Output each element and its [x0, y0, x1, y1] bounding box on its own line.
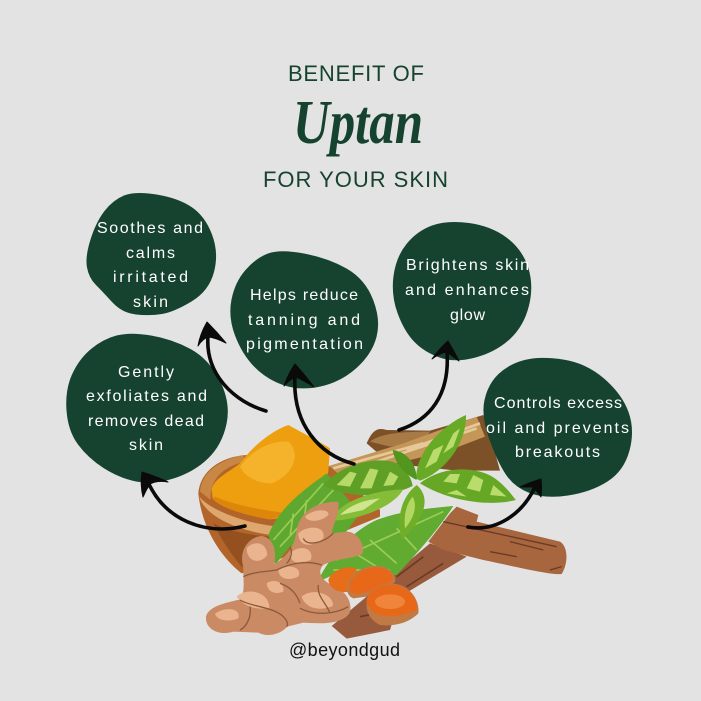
- panel: brightens skin: Brightens skin: [406, 257, 529, 274]
- panel: controls excess oil: Controls excess: [494, 395, 622, 412]
- panel: controls excess oil: breakouts: [515, 444, 600, 461]
- panel: gently exfoliates: skin: [129, 437, 163, 454]
- panel: soothes and calms: [86, 193, 216, 315]
- handle: @beyondgud: @beyondgud: [289, 640, 400, 660]
- panel: helps reduce tanning: pigmentation: [246, 336, 363, 353]
- turmeric slices: [328, 566, 419, 625]
- panel: soothes and calms: Soothes and: [97, 220, 203, 237]
- panel: helps reduce tanning: tanning and: [248, 312, 360, 329]
- panel: controls excess oil: oil and prevents: [486, 420, 629, 437]
- wooden bowl: [198, 455, 380, 573]
- mint sprig: [323, 415, 516, 540]
- turmeric powder: [212, 425, 330, 519]
- panel: brightens skin: [393, 222, 531, 360]
- panel: controls excess oil: [483, 358, 632, 497]
- upper wood stick: [327, 415, 500, 479]
- panel: soothes and calms: skin: [133, 294, 168, 311]
- title: [263, 61, 448, 192]
- panel: gently exfoliates: Gently: [118, 364, 174, 381]
- panel: soothes and calms: calms: [126, 245, 175, 262]
- arrow: to controls: [468, 479, 542, 528]
- red-brown stick lower: [332, 507, 566, 639]
- panel: helps reduce tanning: [230, 251, 378, 388]
- panel: brightens skin: and enhances: [405, 282, 529, 299]
- arrow: to helps reduce: [284, 364, 354, 464]
- panel: brightens skin: glow: [450, 307, 485, 324]
- heading: for your skin: FOR YOUR SKIN: [263, 167, 448, 192]
- arrow: to soothes: [198, 322, 266, 411]
- illustration: uptan ingredients: [198, 415, 566, 639]
- panel: soothes and calms: irritated: [113, 269, 188, 286]
- arrow: to gently exfoliates: [141, 472, 245, 529]
- panel: helps reduce tanning: Helps reduce: [250, 287, 358, 304]
- panel: gently exfoliates: [66, 334, 228, 483]
- heading: benefit of: BENEFIT OF: [288, 61, 424, 86]
- heading: Uptan: Uptan: [293, 89, 423, 157]
- large green leaves: [268, 473, 453, 582]
- panel: gently exfoliates: removes dead: [88, 413, 204, 430]
- panel: gently exfoliates: exfoliates and: [86, 388, 207, 405]
- arrow: to brightens: [399, 341, 459, 430]
- ginger root: [206, 502, 363, 635]
